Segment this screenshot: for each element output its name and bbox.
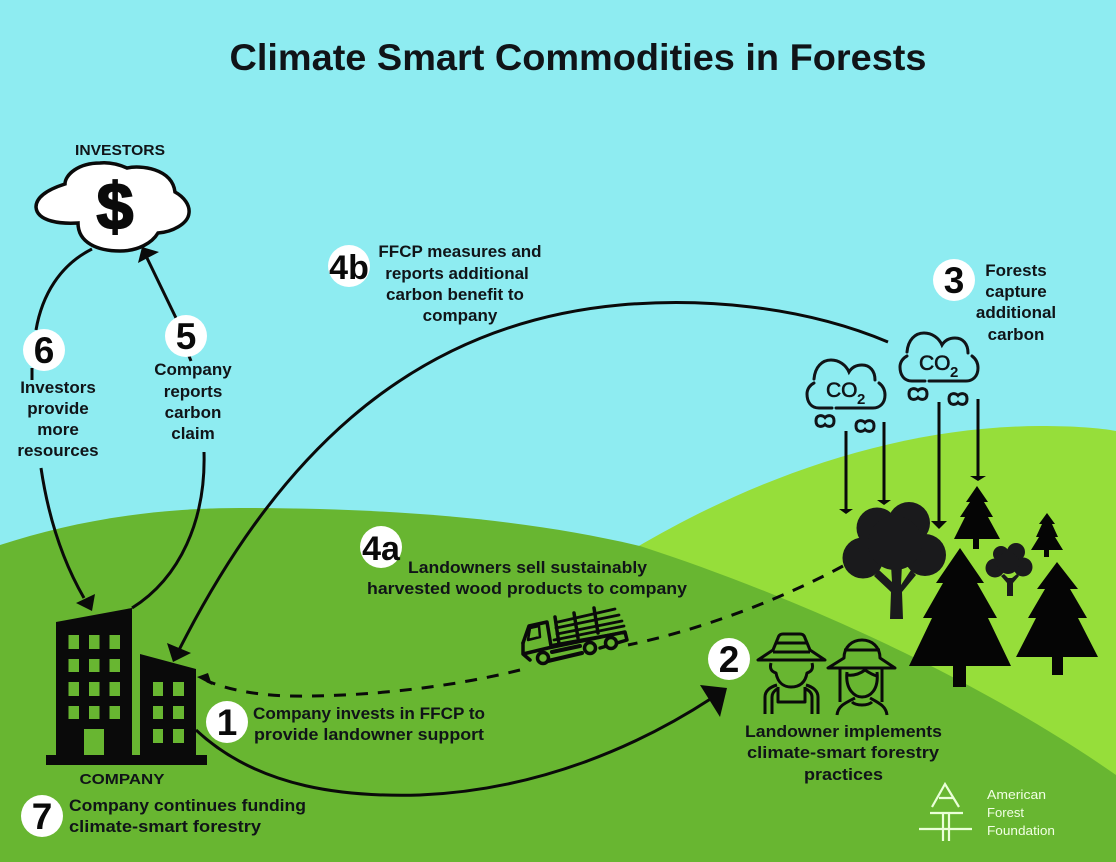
icon: investors cloud with dollar: $ — [97, 169, 133, 243]
text 3: Forests — [985, 261, 1047, 280]
step 5 — [154, 315, 232, 443]
text 2: Landowner implements — [745, 722, 942, 741]
text 3: carbon — [988, 325, 1044, 344]
text 2 — [745, 722, 942, 784]
step 7 — [21, 795, 306, 837]
light green hill — [600, 426, 1116, 800]
badge 1: 1 — [217, 702, 237, 743]
icon: company buildings — [46, 608, 207, 765]
badge 1 — [206, 701, 248, 743]
investors group — [36, 142, 189, 251]
text 7: climate-smart forestry — [69, 817, 262, 836]
text 4a — [367, 558, 688, 598]
text 6: more — [37, 420, 79, 439]
logo text: Forest — [987, 805, 1024, 820]
text 4b: carbon benefit to — [386, 285, 524, 304]
text 1 — [253, 704, 485, 744]
icon: investors cloud with dollar — [36, 163, 189, 251]
text 6: Investors — [20, 378, 96, 397]
logo text — [987, 787, 1055, 838]
text 5: claim — [171, 424, 215, 443]
step 4b — [328, 242, 542, 325]
text 1: provide landowner support — [254, 725, 484, 744]
badge 6: 6 — [34, 330, 54, 371]
tiny pine — [1031, 513, 1063, 557]
icon: log truck — [523, 608, 627, 664]
arrow: 4a wood products dashed — [197, 566, 843, 696]
text 7: Company continues funding — [69, 796, 306, 815]
arrow: 1 company to landowner — [196, 685, 727, 795]
text 5: reports — [164, 382, 222, 401]
icon: CO2 cloud right: CO — [919, 352, 950, 375]
text 2: practices — [804, 765, 883, 784]
logo mark — [919, 784, 972, 841]
text 7 — [69, 796, 306, 836]
large pine — [909, 548, 1011, 687]
logo: American Forest Foundation — [919, 784, 1055, 841]
step 3 — [933, 259, 1056, 344]
arrow: 5 company to investors — [132, 247, 204, 608]
investors label: INVESTORS — [75, 142, 165, 159]
arrows: carbon down to trees — [839, 399, 986, 529]
step 6 — [17, 329, 99, 460]
text 4a: Landowners sell sustainably — [408, 558, 648, 577]
icon: CO2 cloud left: 2 — [857, 391, 865, 408]
text 3: capture — [985, 282, 1047, 301]
title: Climate Smart Commodities in Forests — [230, 37, 926, 78]
text 2: climate-smart forestry — [747, 743, 940, 762]
badge 2 — [708, 638, 750, 680]
icon: CO2 cloud right: 2 — [950, 364, 958, 381]
badge 2: 2 — [719, 639, 739, 680]
badge 3: 3 — [944, 260, 964, 301]
icon: trees — [842, 486, 1098, 687]
text 6: resources — [17, 441, 99, 460]
text 5: carbon — [165, 403, 221, 422]
icon: farmer — [758, 634, 825, 714]
badge 7 — [21, 795, 63, 837]
text 4a: harvested wood products to company — [367, 579, 688, 598]
text 3: additional — [976, 303, 1056, 322]
icon: CO2 cloud right — [900, 333, 978, 404]
icon: CO2 cloud left: CO — [826, 379, 858, 402]
icon: female farmer — [828, 640, 895, 715]
step 4a — [360, 526, 688, 598]
arrow: 4b carbon report to company — [167, 303, 888, 662]
arrow: 6 investors to company — [32, 249, 95, 611]
logo text: American — [987, 787, 1046, 802]
text 4b: FFCP measures and — [378, 242, 542, 261]
logo text: Foundation — [987, 823, 1055, 838]
badge 5: 5 — [176, 316, 196, 357]
dark green hill — [0, 508, 1116, 862]
text 5: Company — [154, 360, 232, 379]
icon: CO2 cloud left — [807, 360, 885, 431]
company label: COMPANY — [80, 771, 164, 788]
badge 4a: 4a — [362, 530, 401, 568]
text 4b: company — [423, 306, 498, 325]
badge 4b: 4b — [329, 249, 369, 287]
badge 7: 7 — [32, 796, 52, 837]
right pine — [1016, 562, 1098, 675]
small broadleaf tree — [986, 543, 1032, 596]
broadleaf tree — [842, 502, 946, 619]
small pine — [954, 486, 1000, 549]
text 1: Company invests in FFCP to — [253, 704, 485, 723]
text 4b: reports additional — [385, 264, 529, 283]
text 6: provide — [27, 399, 89, 418]
step 2 — [708, 638, 942, 784]
step 1 — [206, 701, 485, 744]
